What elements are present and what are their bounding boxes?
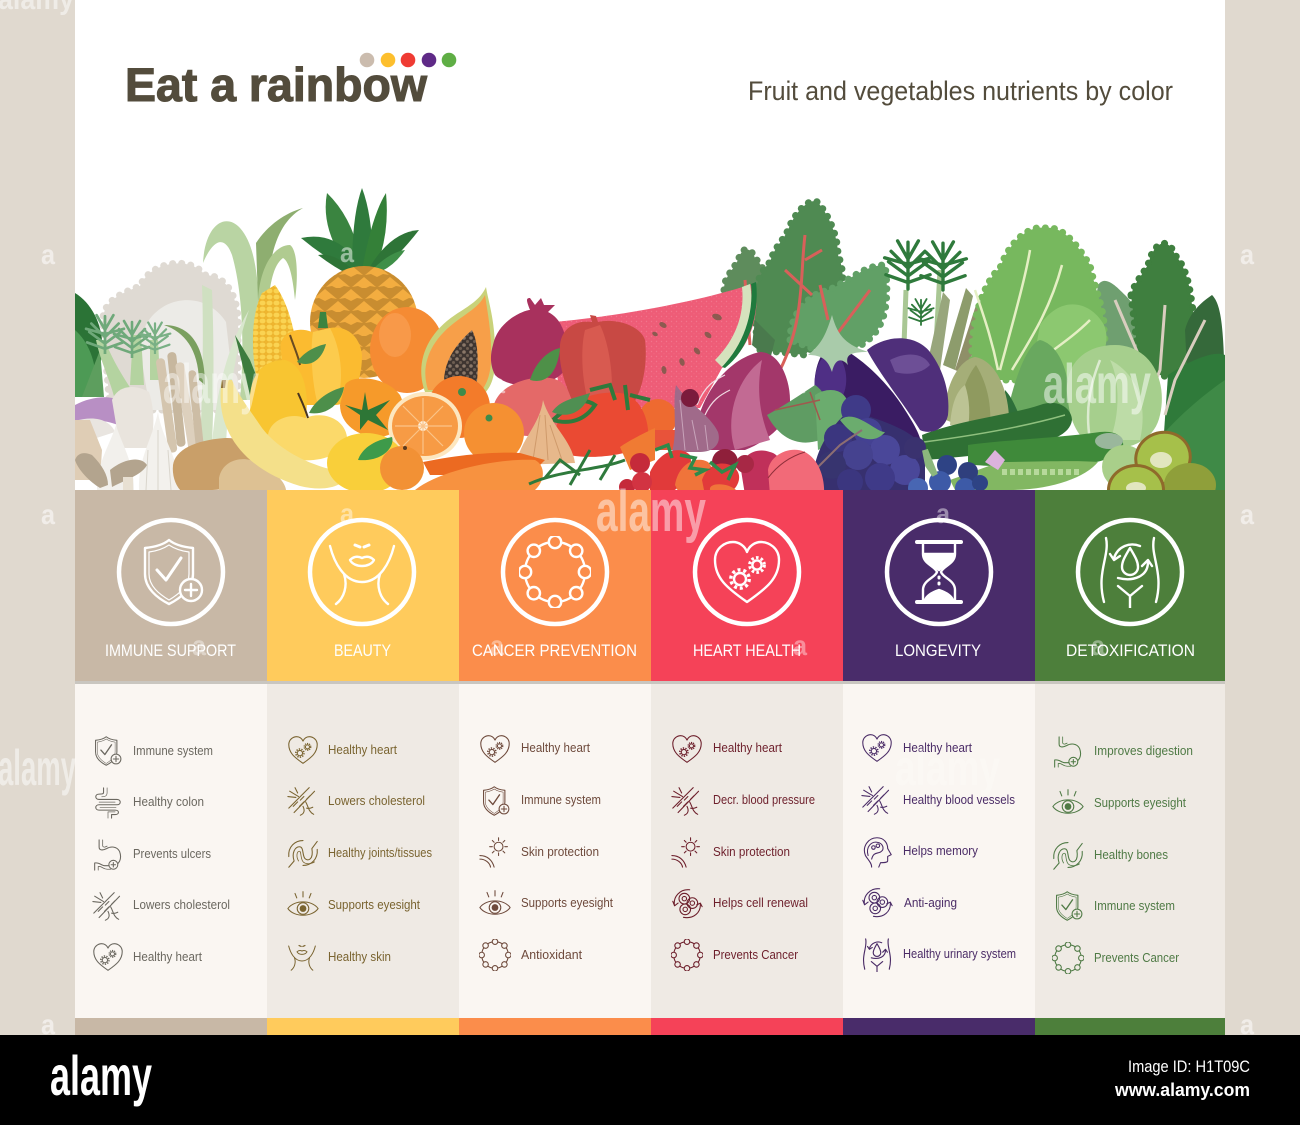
red cherries bbox=[619, 453, 652, 490]
list column: immune support: Healthy colon bbox=[133, 795, 204, 809]
panel: cancer prevention header bbox=[459, 490, 651, 681]
list column: immune support: Immune system bbox=[133, 744, 213, 758]
watermarks: alamy bbox=[1043, 352, 1151, 415]
list column: detoxification: Supports eyesight bbox=[1094, 796, 1186, 810]
watermarks: a bbox=[192, 630, 206, 661]
header shadow line bbox=[75, 681, 1225, 684]
kiwi bbox=[1102, 430, 1216, 490]
footer bar bbox=[0, 1035, 1300, 1125]
list column: immune support: Prevents ulcers bbox=[133, 847, 211, 861]
watermarks: alamy bbox=[163, 352, 259, 415]
watermarks: a bbox=[1240, 239, 1254, 270]
chard leaves bbox=[724, 201, 887, 370]
watermarks: a bbox=[1240, 1009, 1254, 1040]
list column: heart health: Healthy heart bbox=[713, 741, 782, 755]
carrot tops bbox=[885, 241, 966, 345]
footer logo: alamy bbox=[50, 1044, 152, 1107]
list column: cancer prevention: Immune system bbox=[521, 793, 601, 807]
beet leaves bbox=[767, 385, 848, 450]
oranges and tomato bbox=[388, 376, 650, 465]
pale produce front bbox=[75, 352, 286, 491]
yellow peppers bbox=[250, 312, 404, 437]
eggplant and plum bbox=[808, 315, 948, 452]
panel: immune support header: IMMUNE SUPPORT bbox=[105, 641, 236, 660]
illustration: fruit and vegetables bbox=[75, 188, 1225, 516]
list column: immune support: Lowers cholesterol bbox=[133, 898, 230, 912]
list column: cancer prevention: Healthy heart bbox=[521, 741, 590, 755]
white header panel bbox=[75, 0, 1225, 490]
panel: immune support header bbox=[75, 490, 267, 681]
list column: longevity: Healthy blood vessels bbox=[903, 793, 1015, 807]
leek bbox=[164, 208, 303, 445]
panel: cancer prevention header: CANCER PREVENTION bbox=[472, 641, 637, 660]
banana bbox=[220, 380, 350, 488]
icon: face bbox=[310, 520, 414, 624]
yellow apple bbox=[268, 387, 347, 460]
radicchio bbox=[672, 352, 790, 452]
list column: heart health: Helps cell renewal bbox=[713, 896, 808, 910]
bottom colour strip bbox=[75, 1018, 1225, 1035]
panel: beauty header bbox=[267, 490, 459, 681]
watermarks: a bbox=[791, 368, 805, 399]
list column: beauty: Supports eyesight bbox=[328, 898, 420, 912]
lemon and apricot bbox=[327, 433, 424, 493]
list column: longevity: Anti-aging bbox=[904, 896, 957, 910]
carrots bbox=[415, 428, 655, 490]
list column: heart health bbox=[651, 684, 843, 1018]
watermarks: a bbox=[1240, 499, 1254, 530]
watermarks: a bbox=[936, 498, 950, 529]
list column: detoxification: Immune system bbox=[1094, 899, 1175, 913]
list column: longevity: Healthy urinary system bbox=[903, 947, 1016, 961]
list column: longevity: Healthy heart bbox=[903, 741, 972, 755]
panel: heart health header: HEART HEALTH bbox=[693, 641, 801, 660]
white and beige produce: background bbox=[75, 263, 238, 480]
list column: detoxification bbox=[1035, 684, 1225, 1018]
corn bbox=[252, 285, 294, 375]
watermarks: a bbox=[41, 1009, 55, 1040]
orange bbox=[370, 307, 444, 393]
panel: beauty header: BEAUTY bbox=[334, 641, 391, 660]
list column: heart health: Skin protection bbox=[713, 845, 790, 859]
panel: longevity header bbox=[843, 490, 1035, 681]
list column: heart health: Prevents Cancer bbox=[713, 948, 798, 962]
watermarks: a bbox=[793, 630, 807, 661]
icon: body detox bbox=[1078, 520, 1182, 624]
list column: detoxification: Prevents Cancer bbox=[1094, 951, 1179, 965]
icon: antioxidant ring bbox=[503, 520, 607, 624]
watermarks: a bbox=[1091, 630, 1105, 661]
watermarks: a bbox=[41, 239, 55, 270]
watermarks: a bbox=[340, 237, 354, 268]
list column: beauty bbox=[267, 684, 459, 1018]
watermarks: alamy bbox=[895, 740, 1000, 796]
peas bbox=[950, 450, 1098, 490]
list column: heart health: Decr. blood pressure bbox=[713, 793, 815, 807]
list column: cancer prevention: Antioxidant bbox=[521, 948, 583, 962]
watermarks: a bbox=[41, 499, 55, 530]
artichoke bbox=[945, 357, 1009, 432]
papaya bbox=[421, 287, 495, 393]
red apple, pomegranate and pepper bbox=[491, 298, 646, 436]
cabbage bbox=[1067, 345, 1162, 449]
pineapple bbox=[301, 188, 419, 378]
panel: longevity header: LONGEVITY bbox=[895, 641, 981, 660]
watermarks: a bbox=[491, 368, 505, 399]
lettuce bbox=[972, 228, 1107, 440]
icon: heart with gears bbox=[695, 520, 799, 624]
list column: cancer prevention: Supports eyesight bbox=[521, 896, 613, 910]
list column: immune support bbox=[75, 684, 267, 1018]
zucchini bbox=[922, 403, 1123, 467]
watermarks: alamy bbox=[0, 740, 76, 796]
list column: longevity: Helps memory bbox=[903, 844, 979, 858]
footer url: www.alamy.com bbox=[1114, 1080, 1250, 1100]
panel: detoxification header: DETOXIFICATION bbox=[1066, 641, 1195, 660]
list column: longevity bbox=[843, 684, 1035, 1018]
panel: heart health header bbox=[651, 490, 843, 681]
panel: detoxification header bbox=[1035, 490, 1225, 681]
berries and pink fruit bbox=[650, 445, 824, 495]
watermarks: alamy bbox=[596, 479, 706, 544]
list column: detoxification: Healthy bones bbox=[1094, 848, 1168, 862]
list column: detoxification: Improves digestion bbox=[1094, 744, 1193, 758]
list column: beauty: Healthy heart bbox=[328, 743, 397, 757]
icon: shield bbox=[119, 520, 223, 624]
list column: cancer prevention: Skin protection bbox=[521, 845, 599, 859]
watermelon bbox=[553, 282, 763, 409]
list column: cancer prevention bbox=[459, 684, 651, 1018]
watermarks: a bbox=[340, 498, 354, 529]
footer image id: Image ID: H1T09C bbox=[1128, 1057, 1250, 1076]
list column: beauty: Lowers cholesterol bbox=[328, 794, 425, 808]
grapes and blueberries bbox=[813, 395, 988, 498]
icon: hourglass bbox=[887, 520, 991, 624]
colour dots bbox=[360, 53, 456, 67]
list column: beauty: Healthy skin bbox=[328, 950, 391, 964]
watermarks: a bbox=[490, 630, 504, 661]
list column: immune support: Healthy heart bbox=[133, 950, 202, 964]
subtitle: Fruit and vegetables nutrients by color bbox=[748, 76, 1173, 106]
list column: beauty: Healthy joints/tissues bbox=[328, 846, 432, 860]
asparagus bbox=[930, 288, 978, 371]
green leaves right bbox=[1094, 243, 1225, 490]
orange tomato by fig bbox=[642, 399, 675, 450]
title: Eat a rainbow bbox=[125, 58, 427, 111]
